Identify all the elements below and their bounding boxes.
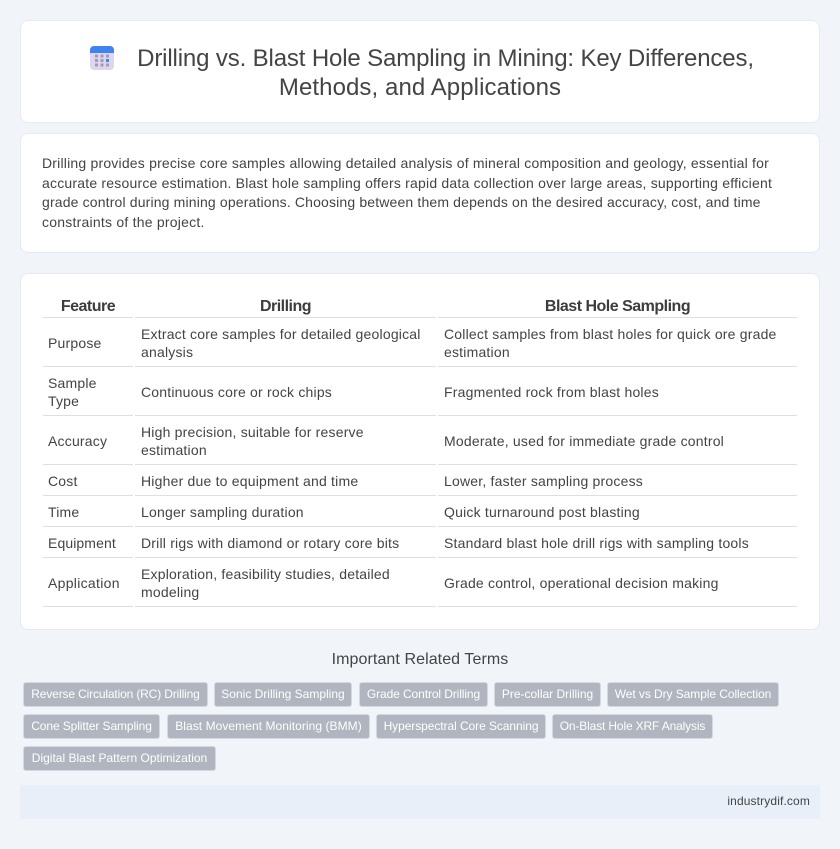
row: sample type: Sample — [48, 375, 97, 391]
tag — [376, 714, 546, 739]
column heading: blast hole sampling: Blast Hole Sampling — [545, 298, 690, 315]
intro paragraph: accurate resource estimation. Blast hole sampling offers rapid data collection over large areas, supporting efficient — [42, 174, 772, 190]
tag: On-Blast Hole XRF Analysis — [560, 719, 705, 733]
footer site name: industrydif.com — [727, 794, 810, 808]
row: cost: Higher due to equipment and time — [141, 473, 358, 489]
row: sample type: Continuous core or rock chips — [141, 384, 332, 400]
related terms heading: Important Related Terms — [332, 651, 508, 668]
row: equipment: Equipment — [48, 535, 116, 551]
footer bar — [20, 785, 820, 819]
tag: Digital Blast Pattern Optimization — [32, 751, 207, 765]
row: sample type: Fragmented rock from blast holes — [444, 384, 659, 400]
row: cost — [48, 473, 643, 489]
tag: Wet vs Dry Sample Collection — [615, 687, 771, 701]
tag — [552, 714, 713, 739]
title: Methods, and Applications — [279, 74, 561, 101]
row: sample type — [48, 375, 659, 409]
intro paragraph: constraints of the project. — [42, 214, 205, 230]
comparison table panel — [20, 273, 820, 630]
row: equipment: Drill rigs with diamond or rotary core bits — [141, 535, 399, 551]
tag — [214, 682, 352, 707]
tag — [607, 682, 779, 707]
title — [137, 45, 754, 101]
title: Drilling vs. Blast Hole Sampling in Mining: Key Differences, — [137, 45, 754, 72]
row: purpose — [48, 326, 777, 360]
tag: Pre-collar Drilling — [502, 687, 593, 701]
tag — [23, 714, 160, 739]
row: equipment: Standard blast hole drill rigs with sampling tools — [444, 535, 749, 551]
column heading: feature: Feature — [61, 298, 115, 315]
row: time: Longer sampling duration — [141, 504, 304, 520]
row: accuracy: Accuracy — [48, 433, 107, 449]
row: application: modeling — [141, 584, 199, 600]
tag — [167, 714, 370, 739]
row: application: Application — [48, 575, 120, 591]
tag: Blast Movement Monitoring (BMM) — [175, 719, 362, 733]
row: time: Time — [48, 504, 79, 520]
row: accuracy: Moderate, used for immediate grade control — [444, 433, 724, 449]
column heading: drilling: Drilling — [260, 298, 311, 315]
intro paragraph: grade control during mining operations. Choosing between them depends on the desired accuracy, cost, and time — [42, 194, 761, 210]
tag: Cone Splitter Sampling — [31, 719, 152, 733]
row: equipment — [48, 535, 749, 551]
row: application: Exploration, feasibility studies, detailed — [141, 566, 390, 582]
row: purpose: Extract core samples for detailed geological — [141, 326, 421, 342]
row: accuracy — [48, 424, 724, 458]
tag — [23, 682, 208, 707]
related terms tags — [23, 682, 779, 771]
row: accuracy: High precision, suitable for reserve — [141, 424, 364, 440]
intro paragraph — [42, 155, 772, 230]
icon: calendar — [90, 46, 114, 70]
intro paragraph: Drilling provides precise core samples allowing detailed analysis of mineral composition and geology, essential for — [42, 155, 769, 171]
row: sample type: Type — [48, 393, 79, 409]
row: purpose: estimation — [444, 344, 510, 360]
row: application: Grade control, operational decision making — [444, 575, 719, 591]
row: purpose: analysis — [141, 344, 193, 360]
tag — [23, 746, 216, 771]
comparison table — [43, 298, 797, 607]
row: purpose: Collect samples from blast holes for quick ore grade — [444, 326, 777, 342]
header panel — [20, 20, 820, 123]
row: cost: Cost — [48, 473, 78, 489]
tag: Reverse Circulation (RC) Drilling — [31, 687, 200, 701]
tag — [494, 682, 601, 707]
tag: Grade Control Drilling — [367, 687, 480, 701]
row: time: Quick turnaround post blasting — [444, 504, 640, 520]
tag: Hyperspectral Core Scanning — [384, 719, 538, 733]
row: purpose: Purpose — [48, 335, 102, 351]
intro text panel — [20, 133, 820, 253]
row: application — [48, 566, 719, 600]
row: time — [48, 504, 640, 520]
tag: Sonic Drilling Sampling — [221, 687, 345, 701]
row: accuracy: estimation — [141, 442, 207, 458]
row: cost: Lower, faster sampling process — [444, 473, 643, 489]
tag — [359, 682, 488, 707]
